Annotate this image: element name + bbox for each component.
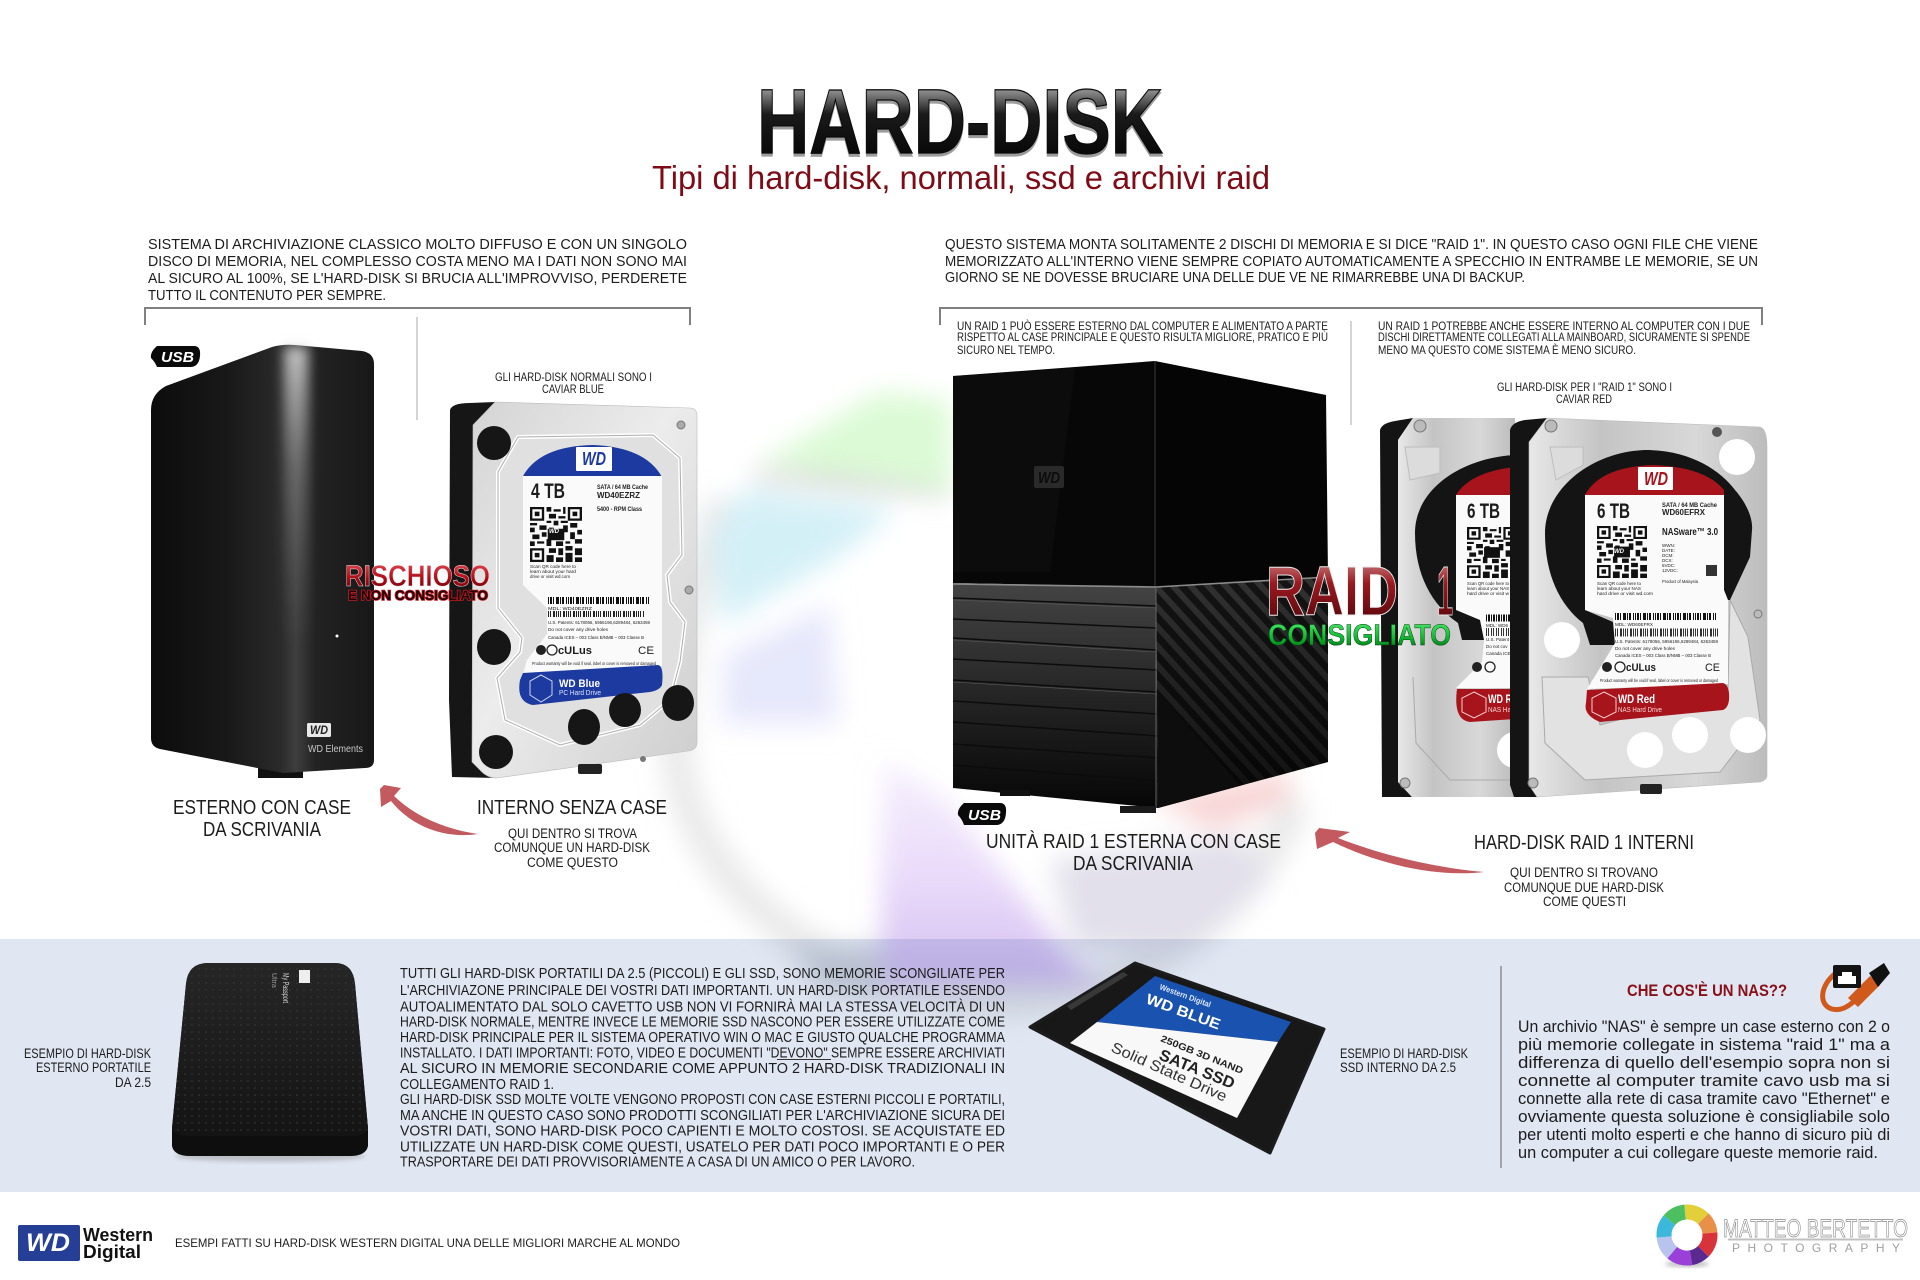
label: esterno con case: DA SCRIVANIA bbox=[203, 818, 321, 841]
device: WD Blue internal hard disk: Do not cover any drive holes bbox=[548, 627, 609, 632]
device: WD Blue SATA SSD: 250GB 3D NAND bbox=[1159, 1034, 1245, 1077]
label: esempio portatile: DA 2.5 bbox=[115, 1075, 151, 1090]
device: front WD Red hard disk: DCX: bbox=[1662, 558, 1673, 563]
text block: right description bbox=[945, 237, 1758, 286]
device: front WD Red hard disk: 12VDC: bbox=[1662, 568, 1678, 573]
label: interno senza case: INTERNO SENZA CASE bbox=[477, 796, 667, 819]
device: WD Elements external drive bbox=[151, 345, 374, 778]
icon: usb badge: USB bbox=[161, 349, 194, 366]
device: back WD Red hard disk bbox=[1380, 418, 1533, 797]
device: back WD Red hard disk: hard drive or visit w bbox=[1467, 591, 1510, 596]
device: back WD Red hard disk: learn about your NAS bbox=[1467, 586, 1509, 591]
label: unita raid esterna: DA SCRIVANIA bbox=[1073, 852, 1193, 875]
background band bbox=[0, 939, 1920, 1192]
device: front WD Red hard disk: DCM: bbox=[1662, 553, 1674, 558]
text block: left description: SISTEMA DI ARCHIVIAZIONE CLASSICO MOLTO DIFFUSO E CON UN SINGOLO bbox=[148, 237, 687, 253]
device: front WD Red hard disk: WD60EFRX bbox=[1662, 508, 1706, 517]
caption: caviar red bbox=[1497, 382, 1672, 406]
note: qui dentro si trovano bbox=[1504, 865, 1664, 909]
device: front WD Red hard disk: WD bbox=[1644, 469, 1668, 489]
logo: western digital: WD bbox=[26, 1229, 70, 1257]
label: hard-disk raid interni: HARD-DISK RAID 1 INTERNI bbox=[1474, 831, 1694, 854]
logo text: matteo bertetto photography bbox=[1723, 1215, 1908, 1255]
text block: raid esterno note: UN RAID 1 PUÒ ESSERE ESTERNO DAL COMPUTER E ALIMENTATO A PARTE bbox=[957, 320, 1328, 333]
note: qui dentro si trova: QUI DENTRO SI TROVA bbox=[508, 826, 637, 841]
text block: nas explanation bbox=[1518, 1018, 1891, 1162]
label: esempio portatile: ESEMPIO DI HARD-DISK bbox=[24, 1046, 151, 1061]
text block: portable and ssd explanation: GLI HARD-DISK SSD MOLTE VOLTE VENGONO PROPOSTI CON CASE ESTERNI PICCOLI E PORTATILI, bbox=[400, 1092, 1005, 1108]
device: WD Elements external drive: WD bbox=[310, 723, 328, 737]
device: WD Blue internal hard disk: WD Blue bbox=[559, 678, 600, 690]
device: WD Blue internal hard disk: Scan QR code here to bbox=[530, 564, 577, 569]
device: front WD Red hard disk: DATE: bbox=[1662, 548, 1675, 553]
badge: rischioso: E NON CONSIGLIATO bbox=[348, 588, 488, 603]
device: front WD Red hard disk: SATA / 64 MB Cache bbox=[1662, 503, 1718, 509]
text block: raid interno note bbox=[1378, 321, 1750, 357]
logo text: matteo bertetto photography: PHOTOGRAPHY bbox=[1732, 1241, 1900, 1255]
device: WD Blue SATA SSD: WD BLUE bbox=[1144, 991, 1223, 1033]
logo: western digital bbox=[18, 1225, 153, 1262]
device: WD Blue internal hard disk: MDL: WD40EZRZ bbox=[548, 606, 592, 611]
text block: portable and ssd explanation: HARD-DISK NORMALE, MENTRE INVECE LE MEMORIE SSD NASCONO PER ESSERE UTILIZZATE COME bbox=[400, 1014, 1005, 1030]
device: back WD Red hard disk: 6 TB bbox=[1467, 500, 1500, 523]
badge: rischioso bbox=[345, 560, 490, 603]
logo: western digital: Western bbox=[83, 1225, 153, 1245]
text block: left description: TUTTO IL CONTENUTO PER SEMPRE. bbox=[148, 288, 386, 304]
text: 1 bbox=[1437, 552, 1453, 630]
device: My Passport portable drive: My Passport bbox=[281, 973, 290, 1004]
text block: nas explanation: più memorie collegate in sistema "raid 1" ma a bbox=[1518, 1036, 1891, 1054]
device: front WD Red hard disk: NAS Hard Drive bbox=[1618, 705, 1662, 714]
text block: raid esterno note bbox=[957, 320, 1328, 357]
badge: raid 1 consigliato: RAID bbox=[1266, 552, 1398, 630]
device: back WD Red hard disk: NAS Ha bbox=[1488, 705, 1512, 714]
text block: portable and ssd explanation: TUTTI GLI HARD-DISK PORTATILI DA 2.5 (PICCOLI) E GLI SSD, SONO MEMORIE SCONGILIATE PER bbox=[400, 966, 1005, 982]
text block: portable and ssd explanation: AUTOALIMENTATO DAL SOLO CAVETTO USB NON VI FORNIRÀ MAI LA STESSA VELOCITÀ DI UN bbox=[400, 998, 1005, 1016]
device: front WD Red hard disk: hard drive or visit wd.com bbox=[1597, 591, 1653, 596]
text block: portable and ssd explanation: HARD-DISK PRINCIPALE PER IL SISTEMA OPERATIVO WIN O MAC E GIUSTO QUALCHE PROGRAMMA bbox=[400, 1030, 1005, 1046]
note: qui dentro si trovano: QUI DENTRO SI TROVANO bbox=[1510, 865, 1658, 880]
device: front WD Red hard disk: 5VDC: bbox=[1662, 563, 1675, 568]
device: front WD Red hard disk: WD bbox=[1614, 549, 1625, 555]
device: WD Blue internal hard disk: 4 TB bbox=[531, 480, 565, 503]
text block: portable and ssd explanation: VOSTRI DATI, SONO HARD-DISK POCO CAPIENTI E MOLTO COSTOSI. SE ACQUISTATE ED bbox=[400, 1124, 1005, 1140]
device: WD Blue internal hard disk: learn about your hard bbox=[530, 569, 577, 574]
device: front WD Red hard disk: Canada ICES – 003 Class B/NMB – 003 Classe B bbox=[1615, 653, 1711, 658]
text block: nas explanation: connette al computer tramite cavo usb ma si bbox=[1518, 1072, 1890, 1090]
arrow: right bbox=[1315, 828, 1484, 873]
device: front WD Red hard disk: NASware™ 3.0 bbox=[1662, 527, 1718, 538]
device: My Passport portable drive: Ultra bbox=[270, 973, 277, 988]
note: qui dentro si trovano: COME QUESTI bbox=[1543, 894, 1626, 909]
caption: caviar red: CAVIAR RED bbox=[1556, 394, 1612, 406]
device: front WD Red hard disk: learn about your NAS bbox=[1597, 586, 1641, 591]
device: front WD Red hard disk bbox=[1510, 418, 1767, 797]
caption: caviar blue: GLI HARD-DISK NORMALI SONO I bbox=[495, 372, 652, 384]
label: esterno con case: ESTERNO CON CASE bbox=[173, 796, 351, 819]
device: front WD Red hard disk: U.S. Patents: 6178056, 5956196,6289484, 6263459 bbox=[1615, 639, 1718, 644]
text block: nas explanation: un computer a cui collegare queste memorie raid. bbox=[1518, 1144, 1878, 1162]
device: back WD Red hard disk: Do not cov bbox=[1486, 644, 1508, 649]
device: WD Blue internal hard disk: WD40EZRZ bbox=[597, 491, 640, 500]
text block: raid interno note: DISCHI DIRETTAMENTE COLLEGATI ALLA MAINBOARD, SICURAMENTE SI SPENDE bbox=[1378, 332, 1750, 344]
device: WD Elements external drive: WD Elements bbox=[308, 743, 363, 755]
device: front WD Red hard disk: WD Red bbox=[1618, 692, 1655, 706]
device: front WD Red hard disk: Scan QR code here to bbox=[1597, 581, 1641, 586]
device: back WD Red hard disk: WD R bbox=[1488, 692, 1512, 706]
footer note: ESEMPI FATTI SU HARD-DISK WESTERN DIGITAL UNA DELLE MIGLIORI MARCHE AL MONDO bbox=[175, 1236, 680, 1250]
text block: nas explanation: Un archivio "NAS" è sempre un case esterno con 2 o bbox=[1518, 1018, 1890, 1036]
note: qui dentro si trova bbox=[494, 826, 650, 870]
subtitle: Tipi di hard-disk, normali, ssd e archivi raid bbox=[652, 159, 1270, 196]
device: WD Blue SATA SSD: Solid State Drive bbox=[1108, 1039, 1229, 1105]
device: back WD Red hard disk: Canada ICE bbox=[1486, 651, 1511, 656]
device: front WD Red hard disk: 6 TB bbox=[1597, 500, 1630, 523]
text block: nas explanation: connette alla rete di casa tramite cavo "Ethernet" e bbox=[1518, 1090, 1890, 1108]
device: WD Blue internal hard disk: CE bbox=[638, 645, 654, 657]
device: WD Blue internal hard disk: PC Hard Drive bbox=[559, 688, 601, 697]
device: WD Blue internal hard disk: 5400 - RPM Class bbox=[597, 507, 643, 513]
text block: right description: GIORNO SE NE DOVESSE BRUCIARE UNA DELLE DUE VE NE RIMARREBBE UNA DI BACKUP. bbox=[945, 270, 1525, 286]
device: WD Blue internal hard disk: Canada ICES – 003 Class B/NMB – 003 Classe B bbox=[548, 635, 644, 640]
label: unita raid esterna: UNITÀ RAID 1 ESTERNA CON CASE bbox=[986, 830, 1281, 853]
text block: left description bbox=[148, 237, 687, 304]
label: esempio ssd: SSD INTERNO DA 2.5 bbox=[1340, 1060, 1456, 1075]
logo: western digital: Digital bbox=[83, 1242, 141, 1262]
device: back WD Red hard disk: MDL: WD6 bbox=[1486, 623, 1508, 628]
text block: portable and ssd explanation: INSTALLATO. I DATI IMPORTANTI: FOTO, VIDEO E DOCUMENTI "DEVONO" SEMPRE ESSERE ARCHIVIATI bbox=[400, 1046, 1005, 1062]
device: WD Blue SATA SSD: SATA SSD bbox=[1157, 1047, 1237, 1093]
note: qui dentro si trova: COMUNQUE UN HARD-DISK bbox=[494, 840, 650, 855]
badge: rischioso: RISCHIOSO bbox=[345, 560, 490, 593]
device: WD Blue internal hard disk: U.S. Patents: 6178056, 5956196,6289484, 6263459 bbox=[548, 620, 650, 625]
device: front WD Red hard disk: Do not cover any drive holes bbox=[1615, 646, 1676, 651]
device: WD Blue internal hard disk: WD bbox=[549, 529, 560, 535]
text block: left description: DISCO DI MEMORIA, NEL COMPLESSO COSTA MENO MA I DATI NON SONO MAI bbox=[148, 254, 687, 270]
logo: photographer mark bbox=[1664, 1212, 1710, 1267]
device: WD Blue internal hard disk: cULus bbox=[558, 645, 592, 657]
icon: ethernet cable bbox=[1823, 963, 1890, 1010]
device: back WD Red hard disk: U.S. Patent bbox=[1486, 637, 1510, 642]
device: My Passport portable drive bbox=[172, 963, 368, 1162]
text block: portable and ssd explanation: L'ARCHIVIAZONE PRINCIPALE DEI VOSTRI DATI IMPORTANTI. UN HARD-DISK PORTATILE ESSENDO bbox=[400, 983, 1005, 999]
title: HARD-DISK bbox=[757, 71, 1163, 173]
text block: raid esterno note: SICURO NEL TEMPO. bbox=[957, 345, 1055, 357]
label: unita raid esterna bbox=[986, 830, 1281, 875]
text block: left description: AL SICURO AL 100%, SE L'HARD-DISK SI BRUCIA ALL'IMPROVVISO, PERDERETE bbox=[148, 271, 687, 287]
device: front WD Red hard disk: CE bbox=[1705, 662, 1720, 674]
text block: portable and ssd explanation: COLLEGAMENTO RAID 1. bbox=[400, 1077, 554, 1093]
text block: nas explanation: per utenti molto esperti e che hanno di sicuro più di bbox=[1518, 1126, 1890, 1144]
device: back WD Red hard disk: Scan QR code here to bbox=[1467, 581, 1509, 586]
label: esempio portatile bbox=[24, 1046, 151, 1090]
watermark: blurred shutter logo bbox=[676, 392, 1295, 1000]
text block: portable and ssd explanation bbox=[400, 966, 1005, 1170]
device: My Book Duo RAID enclosure: WD bbox=[1038, 470, 1060, 487]
text block: raid interno note: UN RAID 1 POTREBBE ANCHE ESSERE INTERNO AL COMPUTER CON I DUE bbox=[1378, 321, 1750, 333]
device: WD Blue internal hard disk: Product warranty will be void if seal, label or cover is removed or damaged bbox=[532, 661, 656, 666]
text block: nas explanation: ovviamente questa soluzione è consigliabile solo bbox=[1518, 1108, 1890, 1126]
icon: usb badge raid: USB bbox=[968, 807, 1001, 824]
heading: che cos'e un nas: CHE COS'È UN NAS?? bbox=[1627, 981, 1787, 1000]
text block: portable and ssd explanation: MA ANCHE IN QUESTO CASO SONO PRODOTTI SCONGILIATI PER L'ARCHIVIAZIONE SICURA DEI bbox=[400, 1108, 1005, 1124]
text block: right description: QUESTO SISTEMA MONTA SOLITAMENTE 2 DISCHI DI MEMORIA E SI DICE "RAID 1". IN QUESTO CASO OGNI FILE CHE VIENE bbox=[945, 237, 1758, 253]
caption: caviar red: GLI HARD-DISK PER I "RAID 1" SONO I bbox=[1497, 382, 1672, 394]
device: front WD Red hard disk: WWN: bbox=[1662, 543, 1675, 548]
device: front WD Red hard disk: MDL: WD60EFRX bbox=[1615, 622, 1653, 627]
device: front WD Red hard disk: Product warranty will be void if seal, label or cover is removed or damaged bbox=[1600, 678, 1718, 683]
device: WD Blue internal hard disk bbox=[449, 402, 697, 778]
device: front WD Red hard disk: cULus bbox=[1626, 662, 1656, 674]
device: WD Blue SATA SSD bbox=[1030, 963, 1324, 1153]
text block: portable and ssd explanation: AL SICURO IN MEMORIE SECONDARIE COME APPUNTO 2 HARD-DISK TRADIZIONALI IN bbox=[400, 1061, 1005, 1077]
icon: usb badge raid bbox=[958, 803, 1006, 825]
label: esterno con case bbox=[173, 796, 351, 841]
text block: raid esterno note: RISPETTO AL CASE PRINCIPALE E QUESTO RISULTA MIGLIORE, PRATICO E PIÙ bbox=[957, 331, 1328, 344]
device: WD Blue internal hard disk: SATA / 64 MB Cache bbox=[597, 485, 649, 491]
icon: usb badge bbox=[151, 346, 200, 367]
device: WD Blue internal hard disk: WD bbox=[582, 449, 606, 469]
caption: caviar blue bbox=[495, 372, 652, 396]
caption: caviar blue: CAVIAR BLUE bbox=[542, 384, 604, 396]
text block: portable and ssd explanation: TRASPORTARE DEI DATI PROVVISORIAMENTE A CASA DI UN AMICO O PER LAVORO. bbox=[400, 1154, 915, 1170]
label: esempio ssd bbox=[1340, 1046, 1468, 1075]
device: WD Blue internal hard disk: drive or visit wd.com bbox=[530, 574, 570, 579]
label: esempio portatile: ESTERNO PORTATILE bbox=[36, 1060, 151, 1075]
badge: raid 1 consigliato: CONSIGLIATO bbox=[1268, 619, 1451, 652]
arrow: left bbox=[380, 785, 478, 835]
text block: right description: MEMORIZZATO ALL'INTERNO VIENE SEMPRE COPIATO AUTOMATICAMENTE A SPECCHIO IN ENTRAMBE LE MEMORIE, SE UN bbox=[945, 254, 1758, 270]
label: esempio ssd: ESEMPIO DI HARD-DISK bbox=[1340, 1046, 1468, 1061]
text block: nas explanation: differenza di quello dell'esempio sopra non si bbox=[1518, 1054, 1890, 1072]
note: qui dentro si trova: COME QUESTO bbox=[527, 855, 618, 870]
device: front WD Red hard disk: Product of Malaysia bbox=[1662, 579, 1698, 584]
note: qui dentro si trovano: COMUNQUE DUE HARD-DISK bbox=[1504, 880, 1664, 895]
text block: raid interno note: MENO MA QUESTO COME SISTEMA È MENO SICURO. bbox=[1378, 344, 1636, 357]
device: WD Blue SATA SSD: Western Digital bbox=[1158, 982, 1212, 1009]
text block: portable and ssd explanation: UTILIZZATE UN HARD-DISK COME QUESTI, USATELO PER DATI POCO IMPORTANTI E O PER bbox=[400, 1140, 1005, 1156]
device: My Book Duo RAID enclosure bbox=[953, 361, 1335, 815]
